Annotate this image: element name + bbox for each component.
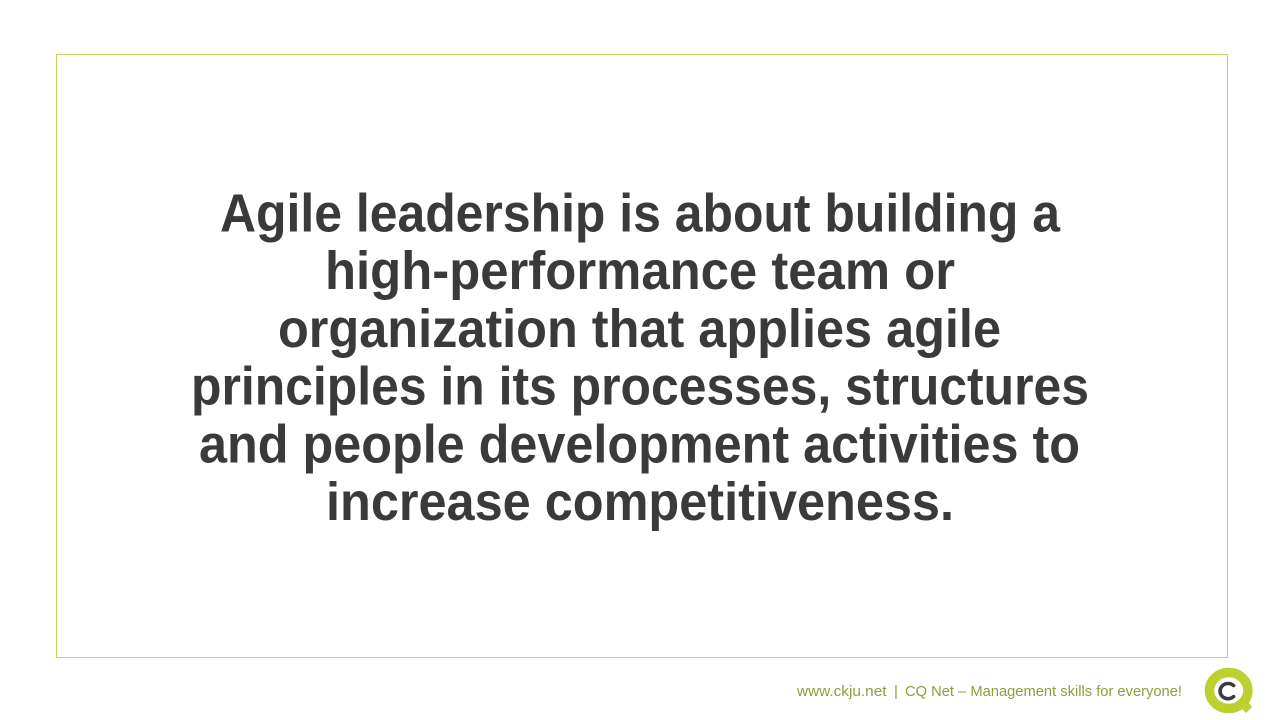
icon: CQ logo [1210, 672, 1252, 713]
footer text: www.ckju.net [796, 683, 887, 700]
heading: agile leadership statement: Agile leadership is about building a [220, 184, 1061, 244]
heading: agile leadership statement: increase competitiveness. [326, 473, 954, 532]
heading: agile leadership statement: principles in its processes, structures [191, 358, 1089, 416]
heading: agile leadership statement [191, 184, 1089, 532]
heading: agile leadership statement: and people development activities to [199, 416, 1080, 474]
heading: agile leadership statement: high-performance team or [325, 242, 955, 301]
panel: framed border [56, 54, 1228, 658]
footer text: CQ Net – Management skills for everyone! [905, 683, 1182, 700]
heading: agile leadership statement: organization that applies agile [278, 300, 1001, 359]
footer text: | [894, 683, 898, 700]
